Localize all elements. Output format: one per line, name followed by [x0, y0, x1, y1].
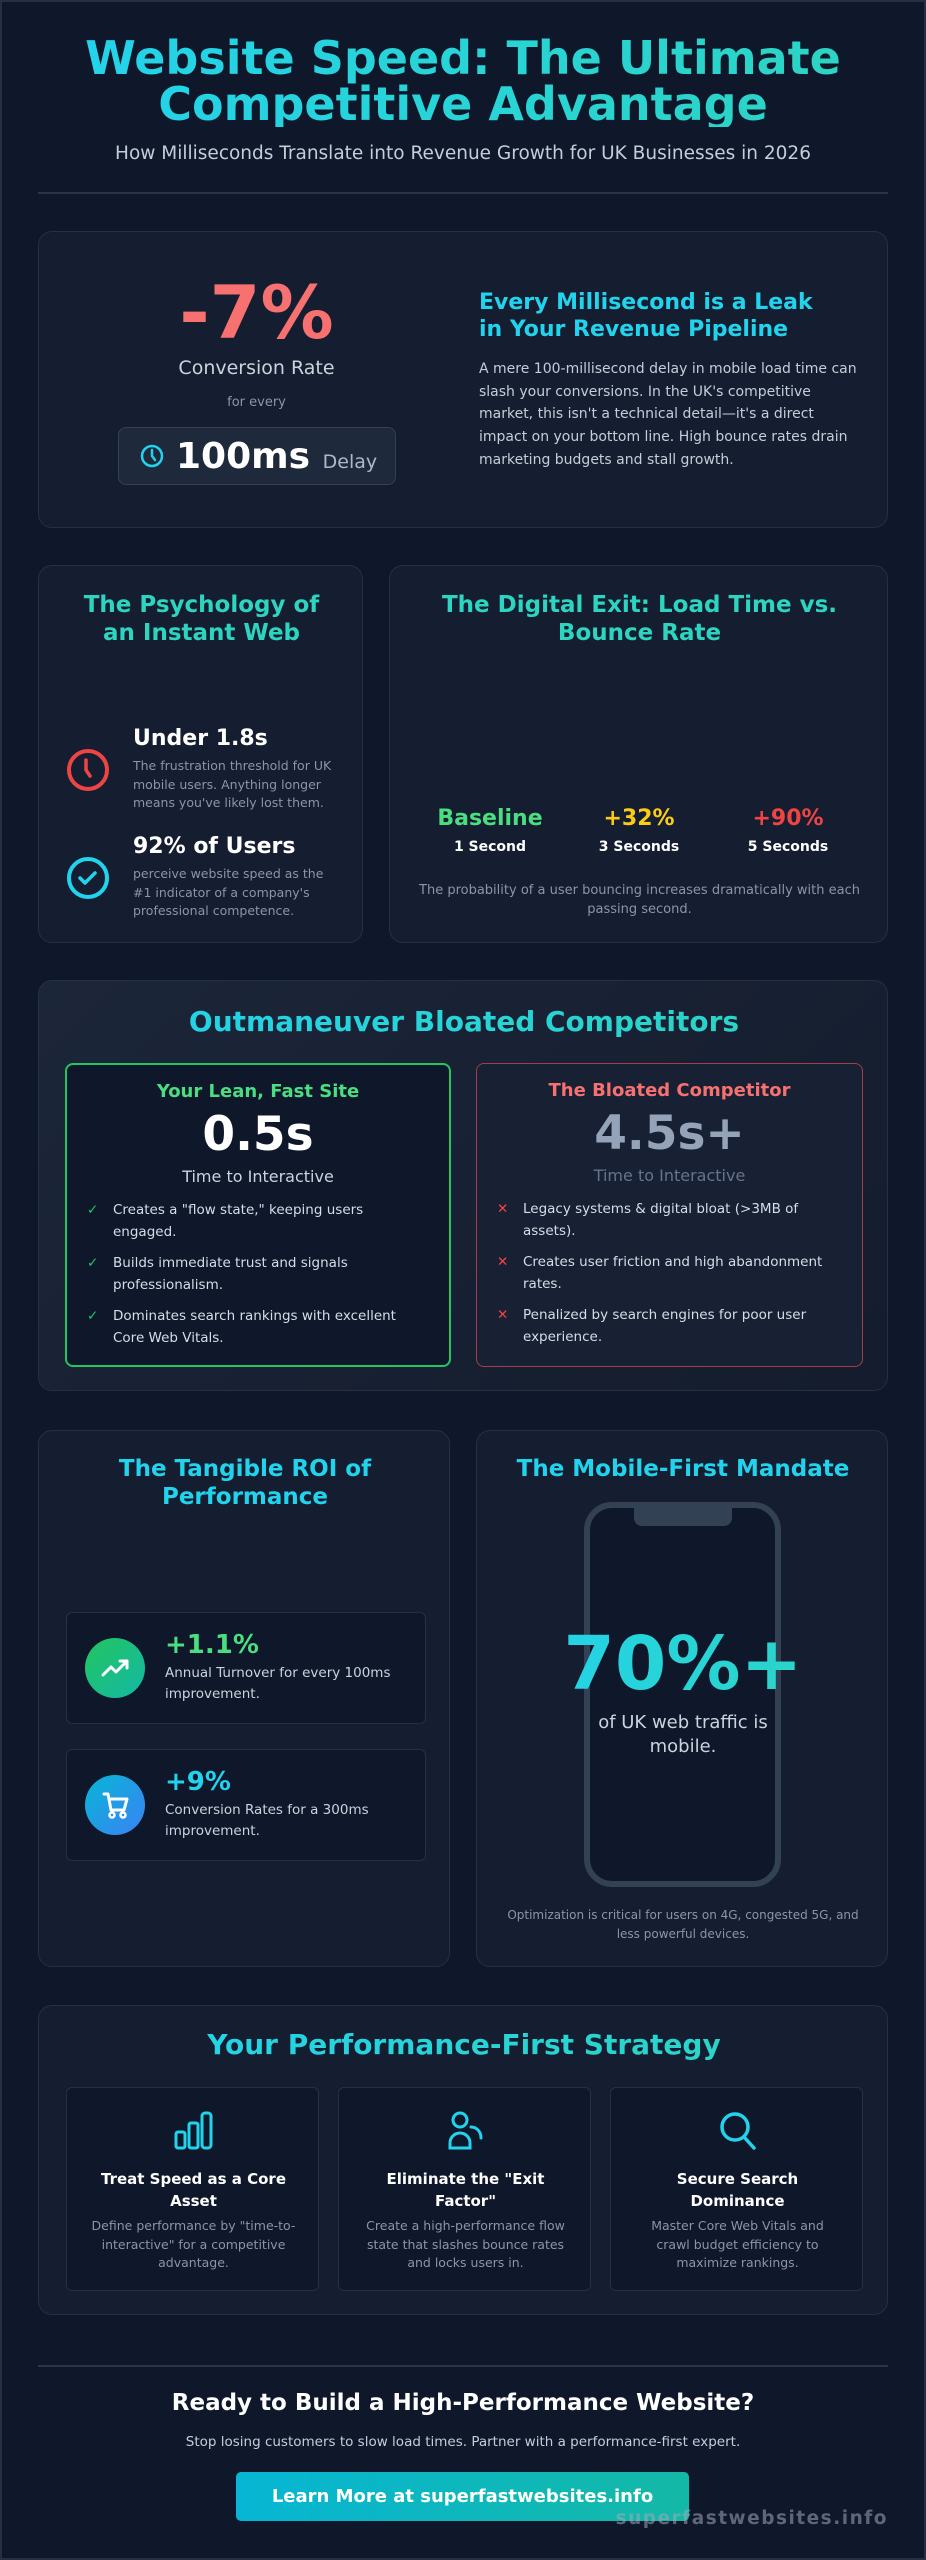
heading: [39, 1005, 889, 1038]
caption: The probability of a user bouncing increases dramatically with each passing second.: [419, 883, 860, 916]
stat box: +9%: Conversion Rates for a 300ms improvement.: [165, 1802, 369, 1839]
box: bloated competitor: The Bloated Competitor: [548, 1080, 790, 1101]
icon: cart: [85, 1775, 145, 1835]
heading: The Mobile-First Mandate: [517, 1456, 849, 1482]
heading: The Digital Exit: Load Time vs.: [442, 592, 837, 618]
box: bloated competitor: 4.5s+: [594, 1106, 745, 1161]
stat box: +9%: [66, 1749, 426, 1861]
label: of UK web traffic is mobile.: [598, 1712, 768, 1757]
card: core asset: Treat Speed as a Core Asset: [101, 2170, 286, 2210]
icon: trend up: [85, 1638, 145, 1698]
panel: mobile-first: [476, 1430, 888, 1967]
list: drawbacks: Penalized by search engines for poor user experience.: [523, 1307, 806, 1345]
box: bloated competitor: [476, 1063, 863, 1367]
subtitle: How Milliseconds Translate into Revenue Growth for UK Businesses in 2026: [115, 143, 811, 164]
list: benefits: ✓: [87, 1255, 98, 1271]
stat: +32%: +32%: [603, 806, 675, 831]
cta button: Learn More at superfastwebsites.info: [272, 2486, 653, 2507]
stat: +32%: [599, 806, 679, 855]
caption: Optimization is critical for users on 4G, congested 5G, and less powerful devices.: [507, 1908, 859, 1941]
heading: [84, 592, 320, 646]
panel: conversion leak: [38, 231, 888, 528]
box: bloated competitor: Time to Interactive: [594, 1166, 745, 1185]
heading: The Psychology of: [84, 592, 319, 618]
icon: user: [448, 2112, 482, 2150]
badge: 100ms delay: 100ms Delay: [176, 436, 377, 477]
heading: Performance: [162, 1484, 328, 1510]
panel: strategy: [38, 2005, 888, 2315]
cta heading: Ready to Build a High-Performance Website?: [172, 2390, 754, 2416]
heading: Bounce Rate: [558, 620, 721, 646]
list: benefits: Creates a "flow state," keeping users engaged.: [113, 1202, 363, 1240]
stat box: +1.1%: Annual Turnover for every 100ms improvement.: [165, 1665, 390, 1702]
item: under 1.8s: The frustration threshold for UK mobile users. Anything longer means you've likely lost them.: [133, 758, 331, 810]
card: exit factor: Eliminate the "Exit Factor": [387, 2170, 544, 2210]
stat: 70%+: [477, 1619, 889, 1709]
list: benefits: Dominates search rankings with excellent Core Web Vitals.: [113, 1308, 396, 1346]
card: search dominance: [610, 2087, 863, 2291]
icon: clock: [140, 444, 164, 468]
item: 92% of users: perceive website speed as the #1 indicator of a company's professional competence.: [133, 866, 323, 918]
stat: baseline: Baseline: [437, 806, 543, 831]
heading: an Instant Web: [103, 620, 300, 646]
list: benefits: [87, 1202, 396, 1346]
stat box: +9%: +9%: [165, 1767, 231, 1797]
list: drawbacks: [497, 1201, 822, 1345]
heading: [39, 2028, 889, 2061]
card: core asset: Define performance by "time-to-interactive" for a competitive advantage.: [92, 2218, 295, 2270]
stat box: +1.1%: [66, 1612, 426, 1724]
panel: digital exit: [389, 565, 888, 943]
heading: [119, 1456, 372, 1510]
panel: tangible ROI: [38, 1430, 450, 1967]
icon: search: [720, 2112, 756, 2150]
cta subtext: Stop losing customers to slow load times. Partner with a performance-first expert.: [186, 2434, 740, 2450]
card: core asset: [66, 2087, 319, 2291]
heading: [442, 592, 837, 646]
list: drawbacks: ✕: [497, 1307, 508, 1323]
box: lean fast site: 0.5s: [202, 1107, 314, 1162]
list: drawbacks: Legacy systems & digital bloat (>3MB of assets).: [523, 1201, 798, 1239]
card: search dominance: Secure Search Dominance: [677, 2170, 798, 2210]
watermark: superfastwebsites.info: [616, 2508, 888, 2529]
item: under 1.8s: Under 1.8s: [133, 726, 268, 751]
paragraph: A mere 100-millisecond delay in mobile load time can slash your conversions. In the UK's competitive market, this isn't a technical detail—it's a direct impact on your bottom line. High bounce rates drain marketing budgets and stall growth.: [479, 361, 857, 468]
stat: +90%: [748, 806, 828, 855]
item: under 1.8s: [67, 726, 332, 810]
list: drawbacks: Creates user friction and high abandonment rates.: [523, 1254, 822, 1292]
icon: cyan check: [67, 857, 109, 899]
stat: 70%+: 70%+: [563, 1621, 803, 1707]
badge: 100ms delay: [118, 427, 396, 485]
label: conversion rate: Conversion Rate: [178, 357, 335, 379]
stat: +90%: +90%: [752, 806, 824, 831]
stat: baseline: 1 Second: [454, 839, 526, 855]
item: 92% of users: [67, 834, 323, 918]
list: benefits: ✓: [87, 1308, 98, 1324]
icon: bar chart: [174, 2112, 212, 2150]
heading: every millisecond: [479, 290, 813, 342]
card: exit factor: Create a high-performance flow state that slashes bounce rates and locks users in.: [366, 2218, 565, 2270]
panel: psychology: [38, 565, 363, 943]
list: benefits: ✓: [87, 1202, 98, 1218]
card: exit factor: [338, 2087, 591, 2291]
stat box: +1.1%: +1.1%: [165, 1630, 259, 1660]
item: 92% of users: 92% of Users: [133, 834, 296, 859]
heading: The Tangible ROI of: [119, 1456, 371, 1482]
stat: +32%: 3 Seconds: [599, 839, 679, 855]
box: lean fast site: [65, 1063, 451, 1367]
heading: every millisecond: in Your Revenue Pipeline: [479, 317, 788, 342]
list: drawbacks: ✕: [497, 1201, 508, 1217]
title: Competitive Advantage: [158, 77, 768, 131]
phone graphic: [584, 1502, 781, 1887]
box: lean fast site: Time to Interactive: [182, 1167, 334, 1186]
stat: +90%: 5 Seconds: [748, 839, 828, 855]
cta button: [236, 2472, 689, 2521]
box: lean fast site: Your Lean, Fast Site: [157, 1081, 359, 1102]
list: benefits: Builds immediate trust and signals professionalism.: [113, 1255, 348, 1293]
list: drawbacks: ✕: [497, 1254, 508, 1270]
title: Website Speed: The Ultimate: [85, 31, 841, 85]
panel: outmaneuver competitors: [38, 980, 888, 1391]
heading: every millisecond: Every Millisecond is a Leak: [479, 290, 813, 315]
heading: Your Performance-First Strategy: [207, 2028, 721, 2061]
title: [0, 35, 926, 127]
stat: baseline: [437, 806, 543, 855]
stat: -7%: -7%: [179, 271, 334, 356]
label: for every: for every: [227, 395, 286, 410]
heading: Outmaneuver Bloated Competitors: [189, 1005, 739, 1038]
icon: red clock: [67, 749, 109, 791]
card: search dominance: Master Core Web Vitals and crawl budget efficiency to maximize rankings.: [651, 2218, 824, 2270]
